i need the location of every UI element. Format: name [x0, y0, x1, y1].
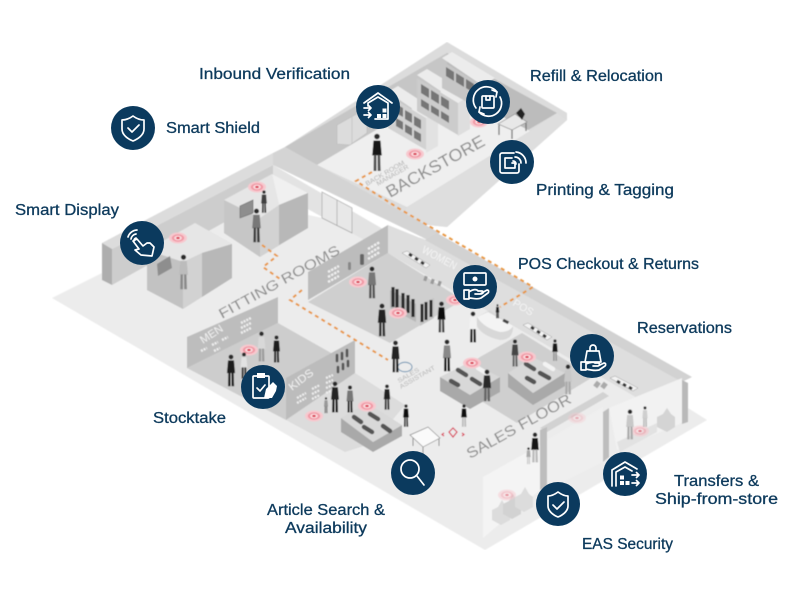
- sales assistant marker: [398, 362, 412, 372]
- panel: men wall: MEN: [198, 323, 226, 347]
- panel: ground floor: [52, 200, 707, 550]
- sales floor island B: [508, 357, 565, 405]
- panel: women wall: [308, 225, 388, 300]
- zone label: sales assistant: SALES: [396, 367, 421, 385]
- label: inbound verification: Inbound Verification: [199, 66, 350, 83]
- label: reservations: Reservations: [637, 320, 732, 337]
- label: stocktake: Stocktake: [153, 410, 226, 427]
- panel: department floors: [187, 253, 593, 452]
- label: printing and tagging: Printing & Tagging: [536, 182, 674, 199]
- panel: kids wall: KIDS: [287, 367, 316, 393]
- zone label: women: WOMEN: [420, 244, 459, 273]
- wall display shelves: [402, 251, 638, 391]
- label: transfers and ship-from-store: Transfers &: [674, 473, 760, 490]
- panel: men wall: [187, 297, 278, 368]
- panel: corridor separating wall with door: [273, 147, 440, 253]
- label: refill and relocation: Refill & Relocation: [530, 68, 663, 85]
- label: transfers and ship-from-store: Ship-from-store: [655, 491, 778, 508]
- zone label: POS: POS: [510, 297, 536, 319]
- icon: POS checkout: [453, 265, 497, 309]
- women clothing racks: [390, 287, 434, 326]
- self service table: [410, 427, 440, 456]
- icon: inbound verification: [356, 85, 400, 129]
- panel: backstore: [285, 42, 567, 227]
- panel: fitting room 1: [224, 174, 308, 257]
- label: smart shield: Smart Shield: [166, 120, 260, 137]
- people: [179, 134, 648, 464]
- icon: refill and relocation: [466, 80, 510, 124]
- red floor marker: [442, 428, 464, 437]
- icon: printing and tagging: [490, 140, 534, 184]
- zone label: sales floor: SALES FLOOR: [464, 391, 574, 462]
- label: article search and availability: Availability: [285, 520, 367, 537]
- outer backstore band: [400, 113, 567, 227]
- icon: smart display: [120, 221, 164, 265]
- panel: outer left wall: [102, 153, 273, 285]
- POS desk: [477, 310, 513, 340]
- zone label: fitting rooms: FITTING ROOMS: [216, 242, 342, 322]
- panel: entrance front: [483, 378, 682, 538]
- kids island: [341, 403, 402, 452]
- packing table with monitor: [498, 108, 527, 139]
- store building illustration: [52, 42, 707, 550]
- icon: article search: [391, 451, 435, 495]
- label: article search and availability: Article Search &: [267, 502, 386, 519]
- label: article search and availability: [267, 502, 386, 537]
- icon: EAS security: [536, 482, 580, 526]
- zone label: back room manager: MANAGER: [376, 164, 410, 188]
- panel: fitting room 2: [147, 223, 232, 309]
- label: POS checkout and returns: POS Checkout & Returns: [518, 256, 699, 273]
- panel: right wall: [388, 225, 692, 424]
- panel: kids wall: [286, 340, 355, 420]
- RFID reader targets: [169, 116, 649, 500]
- label: transfers and ship-from-store: [655, 473, 778, 508]
- icon: reservations: [570, 334, 614, 378]
- label: smart display: Smart Display: [15, 202, 119, 219]
- shelf unit C: [442, 52, 495, 111]
- display stands: [492, 408, 675, 525]
- shelf unit B: [417, 69, 470, 136]
- zone label: back room manager: BACK ROOM: [364, 160, 406, 188]
- dashed route: backstore to POS: [356, 172, 533, 307]
- shelf unit A: [388, 86, 438, 153]
- icon: transfers: [603, 452, 647, 496]
- label: EAS security: EAS Security: [582, 536, 673, 553]
- sales floor island A: [440, 362, 500, 409]
- icon: smart shield: [111, 106, 155, 150]
- zone label: backstore: BACKSTORE: [383, 132, 488, 201]
- dashed route: fitting rooms to sales assistant: [262, 245, 388, 360]
- zone label: sales assistant: ASSISTANT: [398, 365, 437, 391]
- icon: stocktake: [241, 365, 285, 409]
